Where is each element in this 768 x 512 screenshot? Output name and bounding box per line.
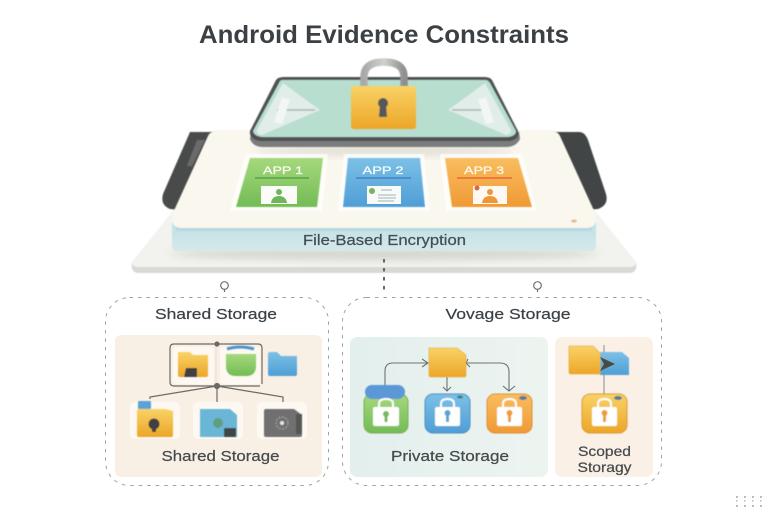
flow arrows [385, 359, 515, 391]
icon: blue folder [600, 352, 629, 375]
card: APP 1 [236, 158, 323, 207]
panel: scoped storage [555, 337, 653, 477]
card: APP 3: APP 3 [464, 165, 504, 177]
icon: padlock [351, 62, 416, 129]
heading: Vovage Storage: Vovage Storage [446, 306, 570, 323]
connector: dashed centre line [383, 259, 385, 293]
watermark dots [736, 496, 762, 507]
icon: yellow folder [178, 352, 208, 377]
divider line [603, 345, 605, 395]
folder hierarchy connectors [150, 342, 283, 402]
label: Shared Storage: Shared Storage [162, 448, 280, 465]
icon: blue folder [268, 352, 297, 376]
icon: green app [226, 347, 256, 376]
icon: orange lock [487, 394, 532, 433]
icon: top folder [429, 348, 466, 377]
illustration: layered device [132, 62, 636, 273]
icon: dark arrow [600, 357, 615, 371]
icon: yellow folder [569, 346, 600, 374]
icon: yellow folder with badge [137, 401, 173, 437]
icon: blue lock [425, 394, 470, 433]
phone shadow [254, 146, 514, 156]
card: APP 2: APP 2 [362, 165, 404, 177]
label: Scoped Storagy: Scoped [578, 443, 631, 459]
card halos [230, 154, 537, 211]
tile backgrounds [130, 347, 307, 439]
connector pin: left [221, 282, 228, 292]
card: APP 2 [343, 158, 425, 207]
icon: green lock [364, 385, 408, 433]
label: Scoped Storagy: Storagy [578, 459, 632, 475]
label: File-Based Encryption: File-Based Encryption [303, 232, 466, 249]
base platform [132, 205, 636, 273]
connector pin: right [534, 282, 541, 292]
icon: orange lock [582, 394, 627, 433]
label: Private Storage: Private Storage [391, 448, 509, 465]
panel: vovage storage [342, 298, 662, 486]
card: APP 1: APP 1 [263, 165, 303, 177]
panel: shared storage [106, 298, 328, 486]
panel: private storage [350, 337, 548, 477]
heading: Shared Storage: Shared Storage [155, 306, 277, 323]
locked phone [250, 77, 520, 147]
title: Android Evidence Constraints [199, 21, 569, 49]
icon: gray disk file [264, 409, 302, 437]
dark device ends [162, 132, 607, 210]
encryption slab [172, 130, 596, 251]
card: APP 3 [445, 158, 532, 207]
icon: blue file [200, 409, 237, 437]
inner panel [115, 335, 322, 477]
